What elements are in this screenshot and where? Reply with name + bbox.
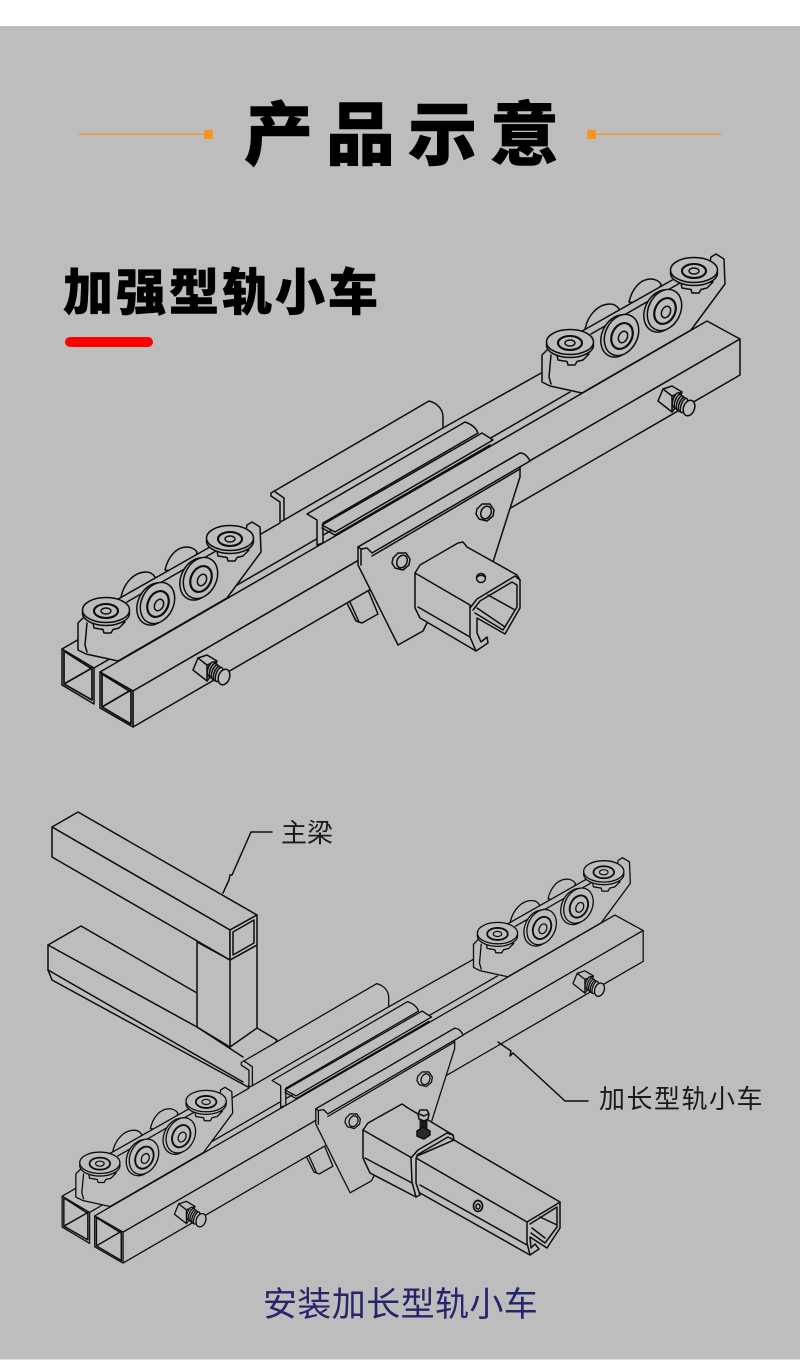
diagram: reinforced track trolley [62,254,740,727]
title: 产品示意 [244,97,572,174]
extended track [363,1104,560,1255]
red accent bar [65,337,153,347]
label: extended trolley: 加长型轨小车 [599,1084,764,1114]
caption: 安装加长型轨小车 [263,1286,538,1324]
title decoration left [79,130,213,139]
title decoration right [587,130,721,139]
leader: extended trolley [498,1042,588,1101]
leader: main beam [223,832,272,893]
label: main beam: 主梁 [281,818,333,848]
diagram: main beam [48,812,277,1087]
diagram: extended track trolley [62,858,643,1263]
subheading: 加强型轨小车 [63,265,381,321]
vertical bolt [417,1110,430,1139]
track section end [415,542,520,651]
